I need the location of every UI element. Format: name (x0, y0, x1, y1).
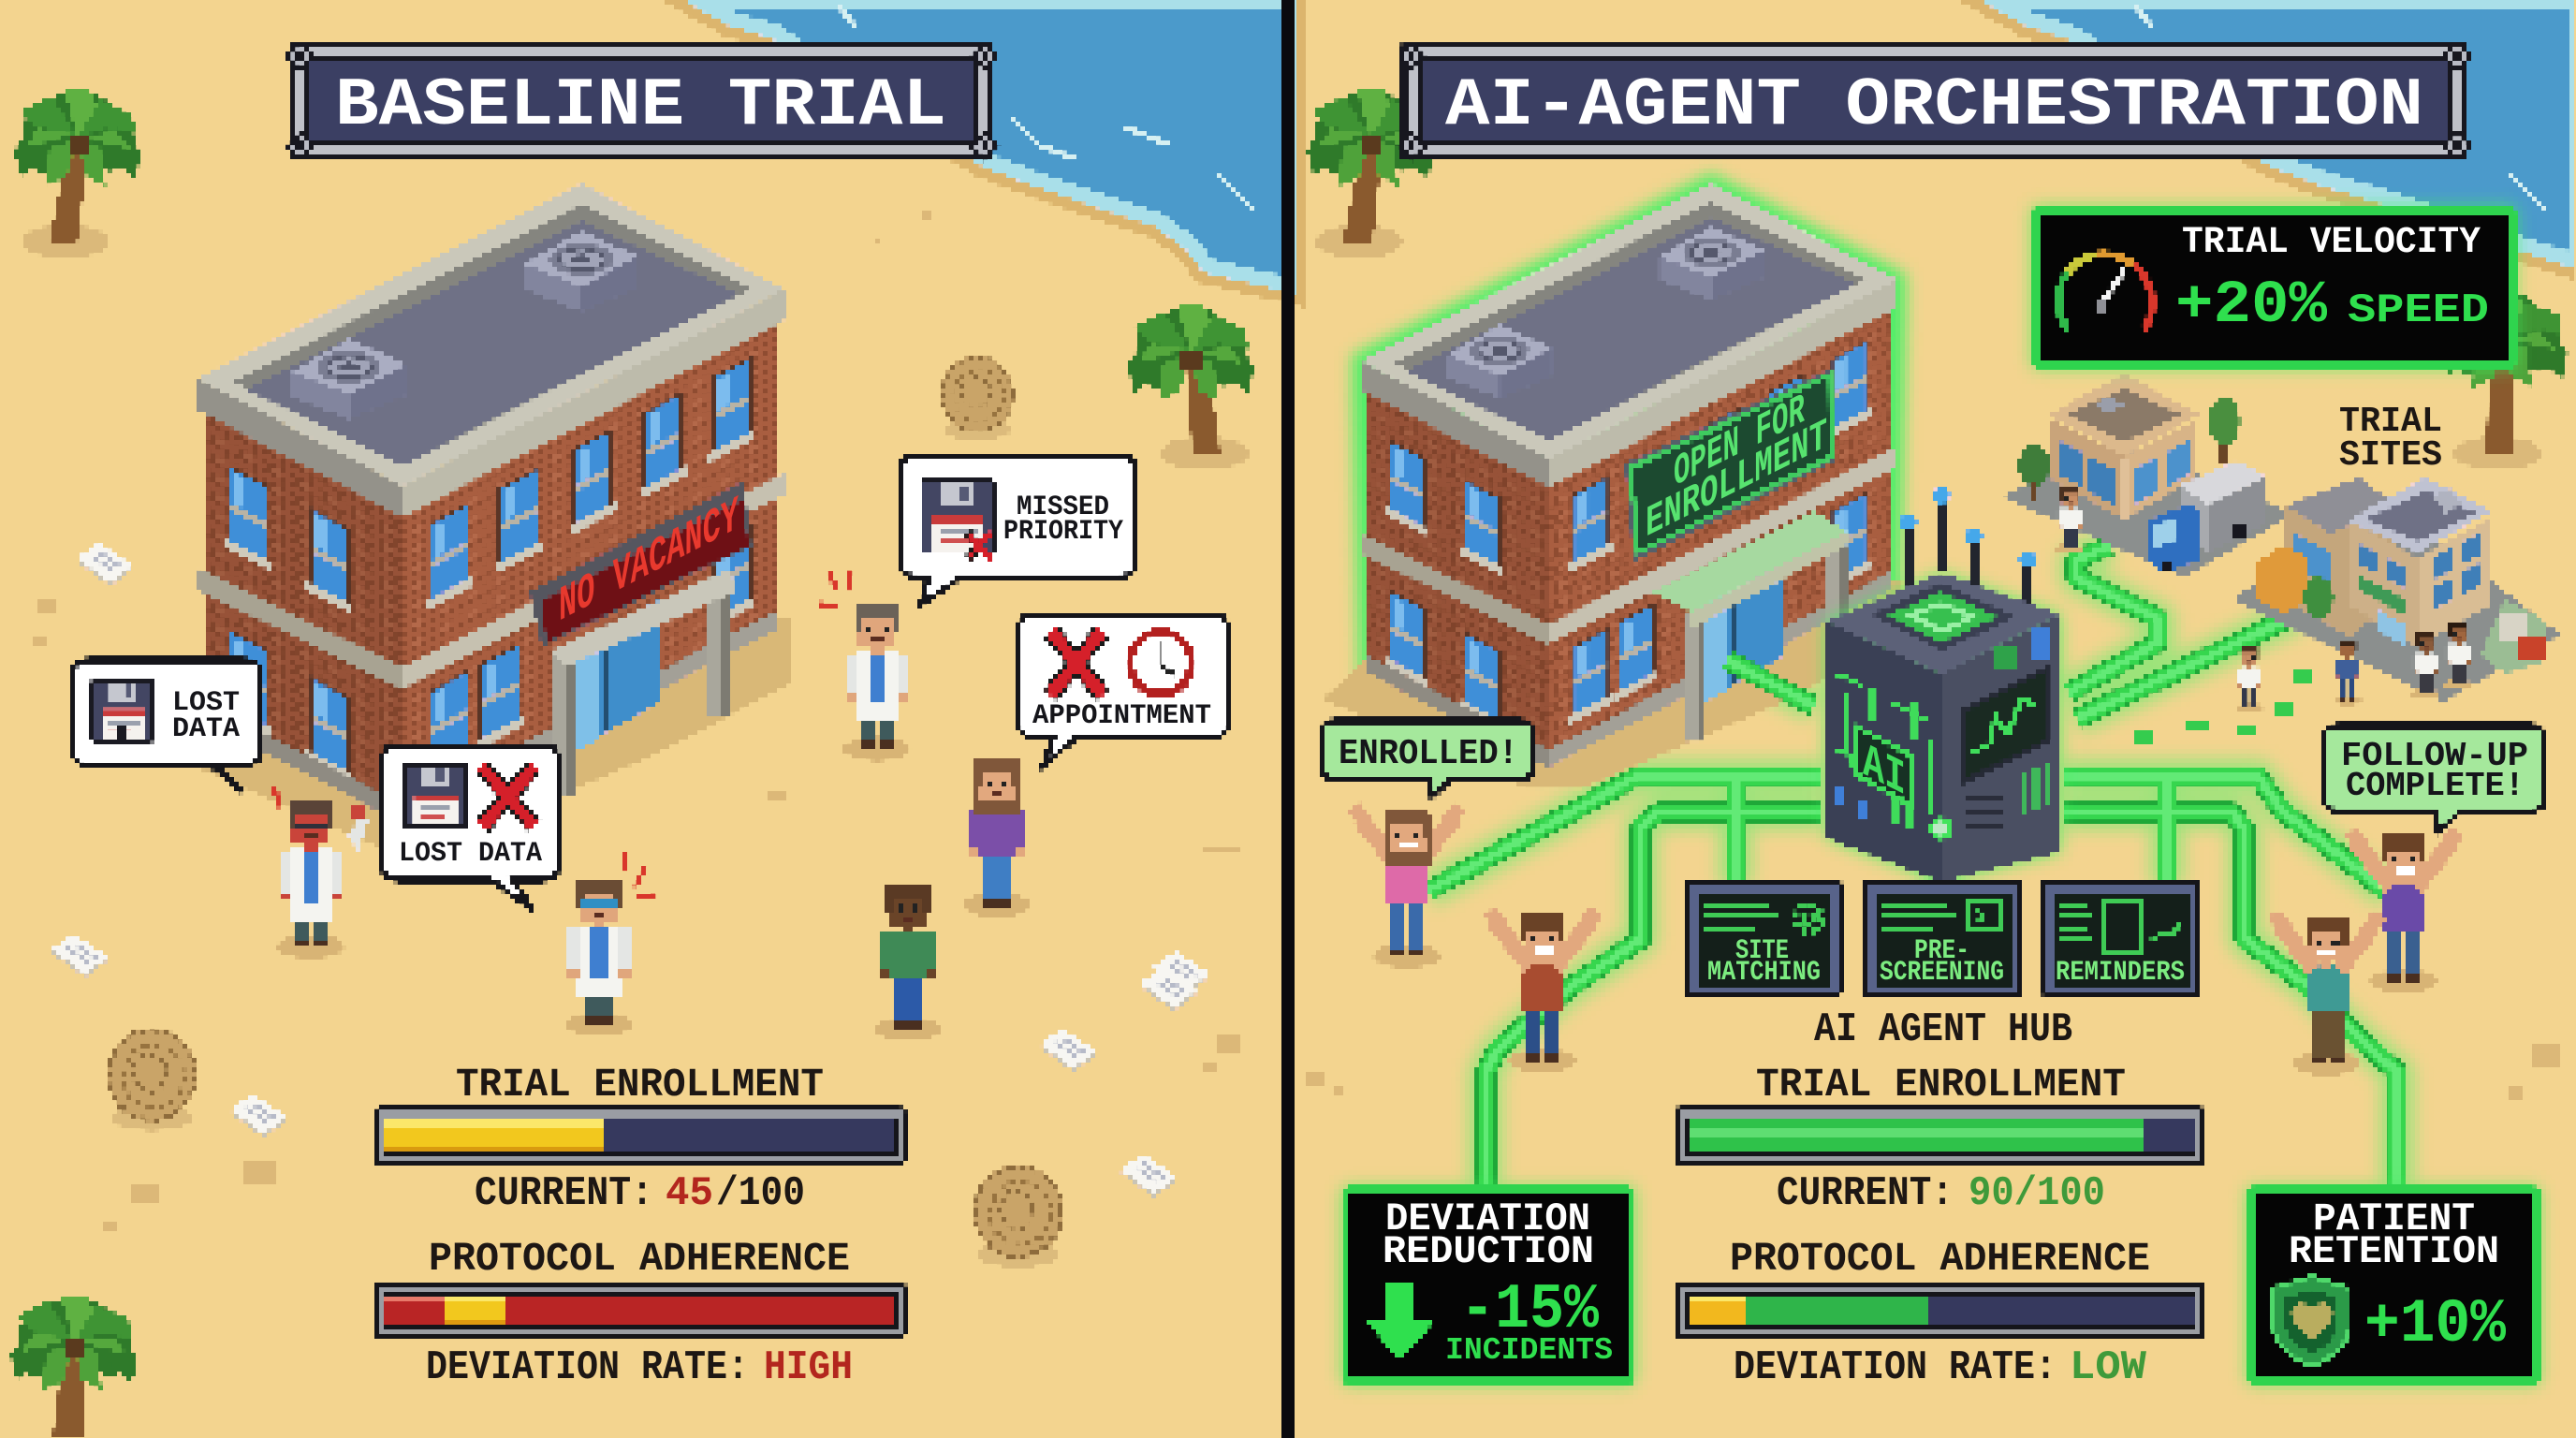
icon: shield with heart (2274, 1276, 2349, 1366)
monitor text: site matching: SITE (1735, 935, 1789, 967)
stat: right current value: CURRENT: (1777, 1170, 1954, 1217)
patient retention text (2289, 1196, 2506, 1359)
bubble text: follow-up complete: COMPLETE! (2346, 767, 2525, 805)
label: trial sites: SITES (2339, 435, 2442, 476)
stat: right trial enrollment heading: TRIAL ENROLLMENT (1756, 1062, 2126, 1108)
scattered papers (51, 543, 1209, 1197)
label: AI agent hub: AI AGENT HUB (1814, 1006, 2072, 1053)
stat: left current value: CURRENT: (475, 1170, 653, 1217)
doctor with goggles (565, 854, 657, 1036)
deviation reduction text: -15% (1460, 1274, 1599, 1346)
bubble text: follow-up complete (2341, 737, 2528, 805)
hub text: AI: AI (1863, 733, 1906, 810)
stat: left trial enrollment heading: TRIAL ENROLLMENT (456, 1062, 824, 1108)
progress bar: right enrollment (1674, 1107, 2206, 1165)
deviation reduction text (1383, 1196, 1613, 1368)
bubble: missed appointment (1018, 614, 1228, 765)
trial site: campus (2232, 477, 2561, 713)
patient retention text: PATIENT (2313, 1196, 2475, 1241)
bubble text: missed priority: MISSED (1017, 492, 1109, 523)
velocity text: SPEED (2348, 287, 2489, 334)
palm tree: top left of right panel (1307, 91, 1434, 258)
agent monitor: reminders (2042, 880, 2200, 996)
stat: left deviation rate: DEVIATION RATE: (426, 1344, 749, 1391)
data pipes (1427, 546, 2397, 1184)
stat: left protocol adherence heading: PROTOCOL ADHERENCE (429, 1236, 850, 1282)
stat: right deviation rate: DEVIATION RATE: (1734, 1344, 2056, 1391)
palm tree: behind velocity panel (2440, 292, 2568, 470)
stat: right deviation rate: LOW (2070, 1344, 2147, 1391)
monitor text: pre-screening: SCREENING (1880, 957, 2004, 989)
sign text: open for enrollment: ENROLLMENT (1646, 409, 1827, 550)
monitor text: pre-screening: PRE- (1914, 935, 1969, 967)
icon: down arrow (1366, 1281, 1434, 1360)
bubble text: lost data left: LOST (172, 687, 240, 719)
deviation reduction text: REDUCTION (1383, 1229, 1594, 1274)
no vacancy sign (530, 481, 752, 667)
center divider (1281, 0, 1295, 1438)
stat: right current value (1777, 1170, 2105, 1217)
AI hub server tower (1826, 487, 2060, 882)
trial site: clinic (2002, 374, 2294, 578)
bubble text: missed priority: PRIORITY (1003, 516, 1123, 548)
deviation reduction text: INCIDENTS (1445, 1333, 1613, 1368)
patient in purple (963, 759, 1031, 917)
icon: speedometer gauge (2058, 254, 2152, 330)
deviation reduction text: DEVIATION (1385, 1196, 1590, 1241)
data packets (2134, 669, 2314, 743)
panel: patient retention (2247, 1186, 2540, 1385)
stat: left current value: /100 (716, 1170, 805, 1217)
patient retention text: RETENTION (2289, 1229, 2499, 1274)
patient in purple shirt (2344, 828, 2464, 993)
sign text: open for enrollment (1646, 373, 1827, 550)
bubble: lost data center (382, 745, 559, 911)
stat: left current value (475, 1170, 805, 1217)
bubble text: missed priority (1003, 492, 1123, 548)
patient retention text: +10% (2364, 1289, 2506, 1359)
monitor text: site matching (1707, 935, 1821, 989)
people cheering (1347, 802, 2464, 1076)
antennas (1900, 487, 2036, 613)
bubble: missed priority (900, 456, 1136, 606)
stat: left current value: 45 (666, 1170, 713, 1217)
bubble: enrolled (1321, 721, 1534, 797)
open for enrollment sign (1625, 367, 1847, 629)
stat: left deviation rate: HIGH (764, 1344, 853, 1391)
left building (154, 183, 791, 847)
title: AI-agent orchestration: AI-AGENT ORCHESTRATION (1445, 67, 2423, 144)
sign text: no vacancy: NO VACANCY (559, 487, 739, 636)
bubble text: follow-up complete: FOLLOW-UP (2341, 737, 2528, 775)
bubble text: lost data left: DATA (172, 713, 240, 745)
sign text: open for enrollment: OPEN FOR (1674, 384, 1805, 499)
banner: AI-agent orchestration (1396, 40, 2473, 162)
monitor text: reminders: REMINDERS (2056, 957, 2185, 989)
bubble text: lost data center: LOST DATA (399, 838, 542, 870)
side panel readout (1962, 646, 2050, 828)
palm tree: bottom left (10, 1296, 138, 1438)
pipes glow (1427, 546, 2397, 1184)
agent monitor: pre-screening (1863, 880, 2022, 996)
patient in pink (1347, 802, 1467, 968)
bubble text: appointment: APPOINTMENT (1032, 700, 1211, 732)
agent monitor: site matching (1685, 880, 1842, 996)
bubble text: enrolled: ENROLLED! (1339, 734, 1518, 774)
palm tree: mid right of left panel (1127, 306, 1254, 470)
title: baseline trial: BASELINE TRIAL (335, 67, 946, 144)
patient in brown shirt (1483, 907, 1603, 1073)
monitor text: site matching: MATCHING (1707, 957, 1821, 989)
label: trial sites (2339, 402, 2442, 476)
velocity text (2175, 222, 2489, 340)
label: trial sites: TRIAL (2339, 402, 2442, 442)
truck (2150, 461, 2265, 573)
panel: trial velocity (2031, 206, 2516, 369)
bubble: lost data left (72, 660, 261, 792)
ocean: right panel (1995, 0, 2576, 261)
progress bar: left enrollment (373, 1107, 906, 1165)
monitor text: pre-screening (1880, 935, 2004, 989)
bubble: follow-up complete (2323, 726, 2545, 831)
sand speckles (33, 211, 2560, 1233)
circuit board face (1837, 674, 1930, 829)
patient in green from behind (874, 883, 942, 1041)
right building with glow (1322, 183, 1903, 788)
panel: deviation reduction (1341, 1186, 1635, 1385)
patient in teal shirt (2267, 910, 2387, 1076)
ocean: left panel (698, 0, 1288, 285)
velocity text: +20% (2175, 272, 2328, 340)
stat: right protocol adherence heading: PROTOCOL ADHERENCE (1730, 1236, 2150, 1282)
tumbleweeds (107, 356, 1063, 1268)
banner: baseline trial (285, 40, 1001, 162)
stat: right current value: 90/100 (1969, 1170, 2105, 1217)
bubble text: lost data left (172, 687, 240, 745)
progress bar: right adherence (1674, 1281, 2206, 1339)
doctor with hand on head (273, 786, 369, 959)
server lights (1835, 627, 2052, 819)
progress bar: left adherence (373, 1281, 906, 1339)
left panel people (273, 569, 1031, 1041)
wave crests (838, 5, 2546, 211)
palm tree: top left (14, 91, 141, 258)
velocity text: TRIAL VELOCITY (2182, 222, 2481, 264)
doctor frustrated (819, 569, 911, 761)
